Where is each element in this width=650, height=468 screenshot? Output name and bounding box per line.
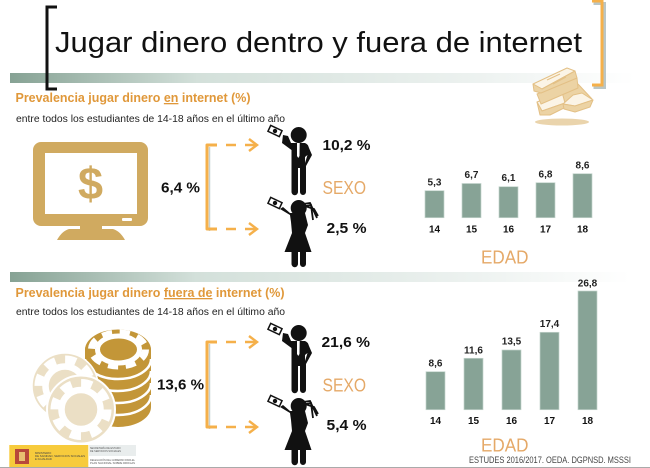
bar 16	[502, 336, 522, 427]
heading: Prevalencia jugar dinero en internet (%)	[16, 90, 250, 105]
bar 17	[540, 319, 560, 427]
bar 15	[462, 170, 481, 236]
total value: 6,4 %	[161, 180, 200, 196]
logo: ministry: DE SERVICIOS SOCIALES	[90, 450, 121, 453]
bar 14: 5,3	[428, 178, 442, 188]
bar 16: 13,5	[502, 336, 522, 348]
bar 14	[425, 178, 444, 236]
section band	[10, 272, 630, 282]
bar 18: 18	[582, 416, 593, 427]
bar 18	[578, 278, 598, 427]
bar 18: 18	[577, 224, 588, 236]
bar 17: 17	[540, 224, 551, 236]
bracket with arrows	[207, 139, 257, 235]
title: Jugar dinero dentro y fuera de internet	[55, 27, 582, 59]
icon: woman holding money	[267, 196, 318, 267]
icon: computer monitor with dollar: $	[78, 158, 103, 209]
logo: ministry: E IGUALDAD	[35, 457, 52, 461]
logo: ministry: DELEGACIÓN DEL GOBIERNO PARA EL	[90, 459, 136, 462]
subheading: entre todos los estudiantes de 14-18 años en el último año	[16, 114, 285, 125]
icon: money stack	[533, 68, 593, 126]
male value: 10,2 %	[322, 137, 370, 154]
bracket with arrows	[207, 336, 257, 433]
right title bracket	[592, 1, 604, 88]
bar 14: 14	[430, 416, 441, 427]
icon: computer monitor with dollar	[33, 142, 148, 240]
sex label: SEXO	[322, 376, 366, 396]
bar 15: 15	[468, 416, 479, 427]
bar 15	[464, 346, 483, 427]
male value: 21,6 %	[322, 334, 370, 351]
sex label: SEXO	[322, 178, 366, 198]
age label: EDAD	[481, 248, 528, 268]
bottom rule	[0, 467, 650, 468]
bar 16: 16	[503, 224, 514, 236]
icon: man holding money	[267, 124, 312, 195]
left title bracket	[47, 7, 57, 89]
bar 15: 15	[466, 224, 477, 236]
logo: ministry: MINISTERIO	[35, 451, 52, 455]
bar 17	[536, 170, 555, 236]
logo: ministry	[9, 445, 136, 467]
bar 17: 6,8	[539, 170, 553, 180]
subheading: entre todos los estudiantes de 14-18 años en el último año	[16, 307, 285, 318]
total value: 13,6 %	[157, 376, 204, 394]
logo: ministry: PLAN NACIONAL SOBRE DROGAS	[90, 462, 135, 465]
bar 17: 17	[544, 416, 555, 427]
bar 16: 6,1	[502, 173, 516, 184]
section 1: online gambling	[16, 90, 592, 268]
icon: casino chips	[32, 330, 151, 444]
bar 18	[573, 160, 592, 236]
bar 14: 14	[429, 224, 440, 236]
section 2: offline gambling	[16, 278, 598, 465]
bar 17: 17,4	[540, 319, 560, 330]
header band	[10, 73, 635, 83]
logo: ministry: DE SANIDAD, SERVICIOS SOCIALES	[35, 454, 85, 458]
icon: man holding money	[267, 322, 312, 393]
bar 15: 6,7	[465, 170, 479, 181]
bar 14	[426, 358, 445, 427]
age label: EDAD	[481, 436, 528, 456]
bar 18: 26,8	[578, 278, 598, 290]
bar 14: 8,6	[429, 358, 443, 370]
bar 16	[499, 173, 518, 236]
bar chart: age online	[425, 160, 592, 236]
logo: ministry: SECRETARÍA DE ESTADO	[90, 447, 121, 450]
heading: Prevalencia jugar dinero fuera de internet (%)	[16, 285, 284, 300]
bar 18: 8,6	[576, 160, 590, 172]
female value: 5,4 %	[326, 417, 366, 434]
icon: woman holding money	[267, 394, 318, 465]
bar chart: age offline	[426, 278, 598, 427]
bar 16: 16	[506, 416, 517, 427]
bar 15: 11,6	[464, 346, 483, 356]
female value: 2,5 %	[326, 220, 366, 237]
